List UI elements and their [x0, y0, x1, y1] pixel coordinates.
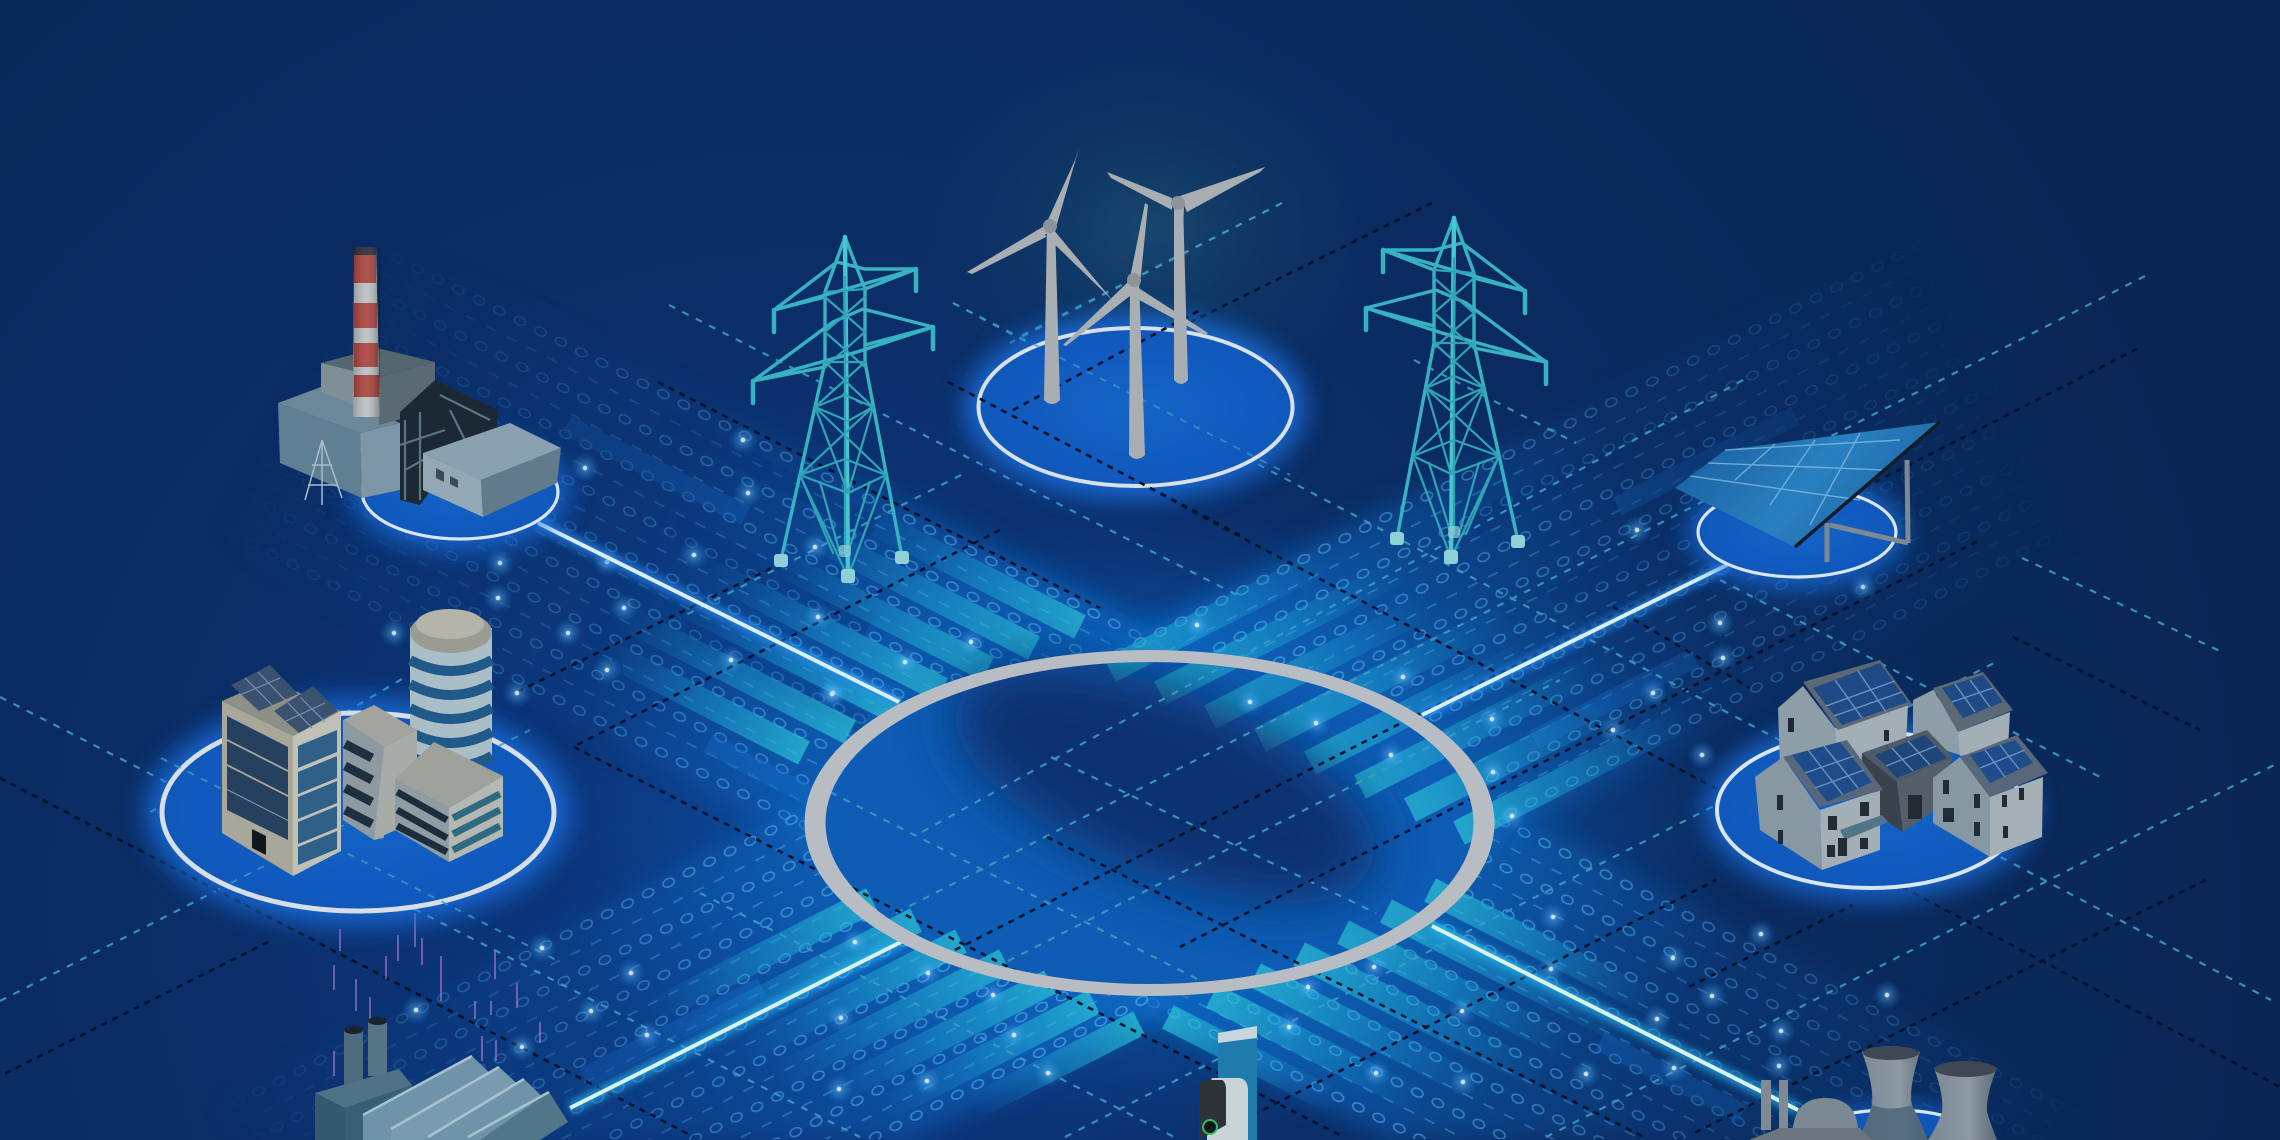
disc: nuclear plant: [1800, 1106, 1984, 1138]
end block: [315, 1069, 412, 1140]
EV charger: [1199, 1026, 1257, 1140]
home center: [1860, 730, 1953, 832]
panel: [1675, 422, 1940, 547]
teal bars radiating from hub: [593, 506, 1697, 1123]
disc: wind turbines: [948, 203, 1306, 535]
sawtooth roofs: [363, 1056, 568, 1140]
disc: office district: [146, 698, 570, 962]
factory: [315, 1017, 568, 1140]
pink energy sparks: [334, 913, 540, 1076]
exhaust stacks: [1761, 1080, 1788, 1130]
connector: factory to hub: [570, 942, 901, 1108]
connector: solar array to hub: [1422, 565, 1727, 715]
low block: [395, 742, 503, 862]
turbine one: [967, 148, 1114, 404]
small pylon on wall: [305, 440, 342, 505]
disc: power plant: [352, 434, 568, 550]
cooling tower rear: [1858, 1046, 1928, 1140]
nuclear plant: [1749, 1046, 1997, 1140]
light sparkles: [379, 425, 1902, 1104]
home front right: [1933, 735, 2048, 857]
machinery: [400, 380, 497, 505]
wind turbines: [967, 148, 1265, 459]
hub interior fill: [820, 658, 1480, 988]
homes with rooftop solar: [1755, 660, 2048, 870]
home back left: [1778, 660, 1912, 770]
office buildings: [222, 609, 503, 876]
post: [1218, 1035, 1257, 1140]
home back right: [1913, 672, 2013, 756]
solar array: [1675, 422, 1940, 562]
glow around hub: [560, 513, 1740, 1133]
striped chimney: [353, 247, 380, 417]
tower: right pylon: [1366, 218, 1546, 564]
tall block: [222, 665, 341, 876]
support frame: [1827, 460, 1908, 562]
connector: power plant to hub: [538, 523, 899, 702]
upper block: [321, 348, 435, 425]
power plant buildings: [278, 247, 561, 517]
disc: rooftop-solar homes: [1705, 720, 2035, 900]
tower: left pylon: [753, 237, 933, 583]
main block: [278, 387, 400, 498]
turbine two: [1107, 167, 1265, 384]
mid block: [343, 705, 417, 840]
cooling tower front: [1928, 1061, 1997, 1140]
data band: northeast to southwest: [253, 262, 2029, 1140]
glow behind wind turbines: [920, 40, 1380, 420]
turbine three: [1063, 203, 1208, 459]
charger body: [1207, 1078, 1248, 1140]
connector: nuclear plant to hub: [1432, 926, 1798, 1110]
disc: solar array: [1689, 476, 1905, 588]
dark shadow inside hub: [922, 613, 1408, 953]
data band: northwest to southeast: [268, 266, 2053, 1140]
home front left: [1755, 740, 1888, 870]
small annex: [423, 423, 561, 517]
charging socket: [1203, 1120, 1217, 1134]
round tower: [410, 609, 492, 772]
smokestacks: [344, 1017, 387, 1087]
reactor dome: [1749, 1098, 1872, 1140]
hub ring: [804, 650, 1494, 996]
